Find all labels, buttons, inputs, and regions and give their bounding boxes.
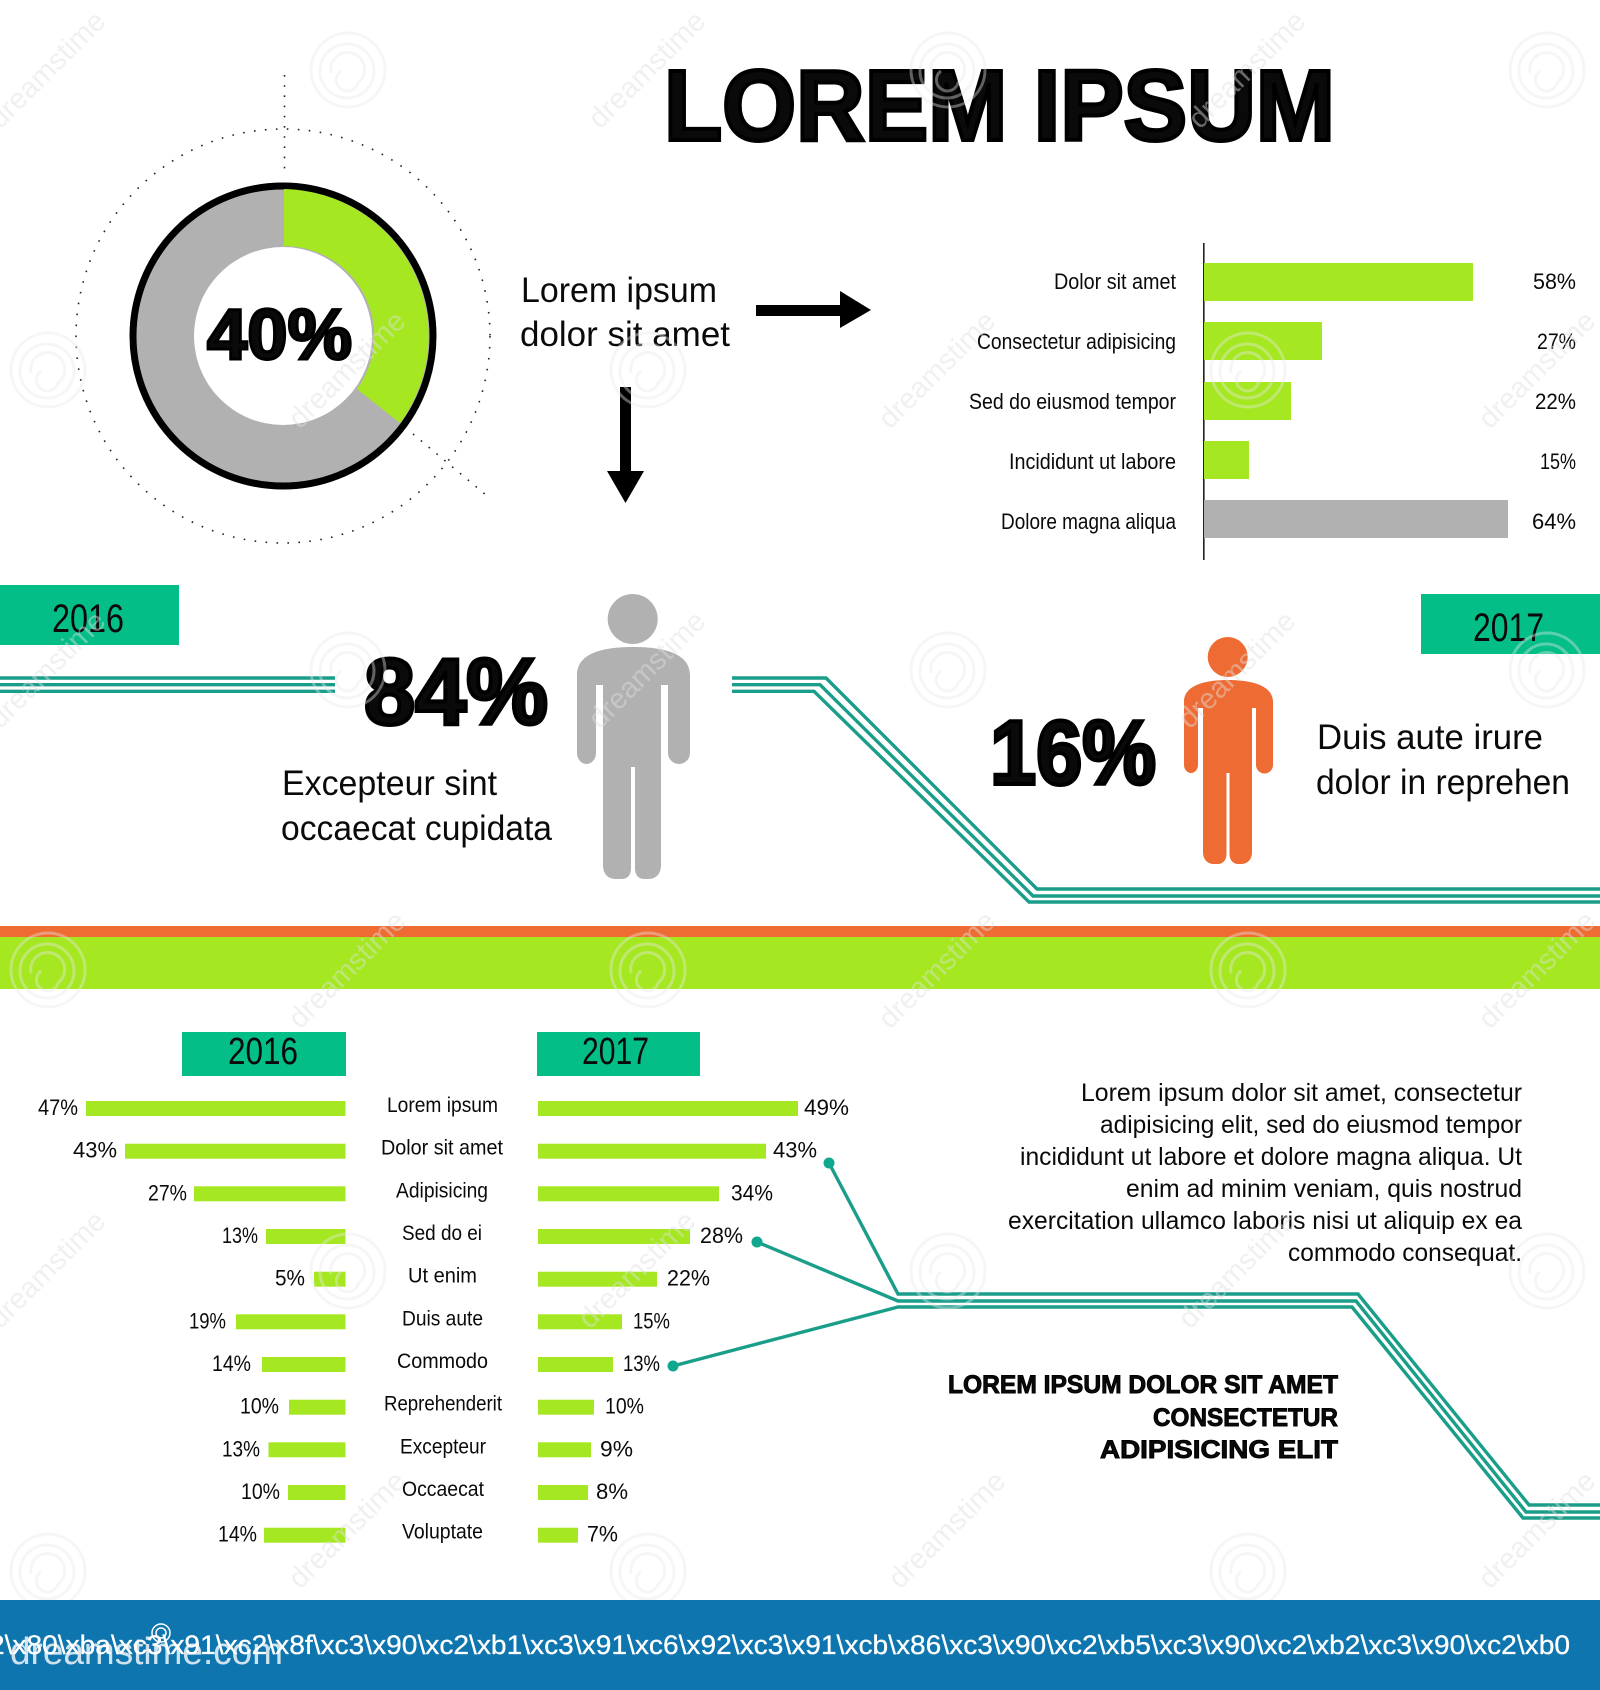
- watermark text: dreamstime: [872, 305, 1002, 435]
- connector dots: [668, 1158, 834, 1372]
- watermark text: dreamstime: [1472, 305, 1600, 435]
- chart: 2017 bars: [537, 1031, 849, 1547]
- values 2016: 5%: [275, 1266, 305, 1291]
- bold subheading: LOREM IPSUM DOLOR SIT AMET: [948, 1371, 1338, 1399]
- row labels: Adipisicing: [396, 1179, 488, 1202]
- chart: 2016 bars: [38, 1031, 346, 1547]
- values 2016: 47%: [38, 1095, 78, 1120]
- year tag: 2016: 2016: [52, 597, 124, 641]
- bar: incididunt ut labore 15%: [1009, 441, 1576, 479]
- values 2017: 49%: [804, 1095, 849, 1120]
- watermark text: dreamstime: [282, 1465, 412, 1595]
- chart heading: 2016: [182, 1031, 346, 1076]
- values 2017: 15%: [633, 1308, 670, 1333]
- donut base: [133, 186, 433, 486]
- bar: consectetur adipisicing 27%: Consectetur adipisicing: [977, 329, 1176, 354]
- row labels: Lorem ipsum: [387, 1094, 498, 1117]
- year tag: 2017: [1421, 594, 1600, 654]
- values 2016: 14%: [218, 1522, 257, 1547]
- donut caption: dolor sit amet: [520, 315, 730, 354]
- bar: dolore magna aliqua 64%: Dolore magna aliqua: [1001, 509, 1177, 534]
- donut hole: [194, 247, 372, 425]
- row labels: Duis aute: [402, 1307, 483, 1330]
- row labels: Reprehenderit: [384, 1393, 502, 1416]
- caption: duis aute: dolor in reprehen: [1316, 763, 1570, 802]
- watermark text: dreamstime: [1172, 605, 1302, 735]
- bar: dolor sit amet 58%: Dolor sit amet: [1054, 269, 1176, 294]
- caption: occaecat cupidata: [281, 809, 553, 848]
- bars 2016: [86, 1101, 346, 1543]
- row labels: Ut enim: [408, 1265, 477, 1288]
- stat: 84%: 84%: [364, 639, 548, 744]
- values 2017: 7%: [587, 1522, 618, 1547]
- teal lines: middle diagonal: [732, 678, 1600, 902]
- watermark text: dreamstime: [1172, 1205, 1302, 1335]
- caption: Excepteur sint: [282, 764, 497, 803]
- values 2017: 22%: [667, 1266, 710, 1291]
- bar: dolore magna aliqua 64%: [1001, 500, 1576, 538]
- bold subheading: CONSECTETUR: [1153, 1404, 1338, 1432]
- values 2017: 8%: [596, 1479, 628, 1504]
- chart heading: 2016: 2016: [228, 1031, 298, 1073]
- values 2016: [38, 1095, 305, 1547]
- row labels: Commodo: [397, 1350, 488, 1373]
- teal lines: left stub: [0, 678, 335, 691]
- arrow: right: [756, 291, 871, 328]
- paragraph: enim ad minim veniam, quis nostrud: [1126, 1175, 1522, 1203]
- connector lines from bars: [668, 1158, 1600, 1518]
- values 2016: 19%: [189, 1308, 226, 1333]
- footer logo text: dreamstime.com: [10, 1631, 283, 1673]
- values 2016: 13%: [222, 1223, 258, 1248]
- bold subheading: ADIPISICING ELIT: [1100, 1436, 1338, 1464]
- year tag: 2016: [0, 585, 179, 645]
- paragraph: incididunt ut labore et dolore magna aliqua. Ut: [1020, 1143, 1522, 1171]
- values 2017: 10%: [605, 1394, 644, 1419]
- axis: [1203, 243, 1205, 560]
- values 2017: 34%: [731, 1180, 773, 1205]
- title: LOREM IPSUM: [664, 50, 1335, 162]
- bar: sed do eiusmod tempor 22%: 22%: [1535, 389, 1576, 414]
- row labels: Occaecat: [402, 1478, 484, 1501]
- watermark text: dreamstime: [582, 605, 712, 735]
- watermark text: dreamstime: [582, 5, 712, 135]
- bold subheading: [948, 1371, 1338, 1464]
- watermark text: dreamstime: [572, 1205, 702, 1335]
- icon: orange person: [1184, 637, 1273, 864]
- donut chart: 40%: [76, 75, 490, 543]
- caption: duis aute: Duis aute irure: [1317, 718, 1543, 757]
- values 2017: 28%: [700, 1223, 743, 1248]
- bars 2017: [538, 1101, 798, 1543]
- paragraph: adipisicing elit, sed do eiusmod tempor: [1100, 1111, 1522, 1139]
- bar: sed do eiusmod tempor 22%: [969, 382, 1576, 420]
- bar: consectetur adipisicing 27%: [977, 322, 1576, 360]
- watermark text: dreamstime: [1472, 905, 1600, 1035]
- year tag: 2017: 2017: [1473, 606, 1544, 650]
- paragraph: commodo consequat.: [1288, 1239, 1522, 1267]
- row labels: Sed do ei: [402, 1222, 482, 1245]
- bar: consectetur adipisicing 27%: 27%: [1537, 329, 1576, 354]
- paragraph: [1008, 1079, 1522, 1267]
- values 2017: 43%: [773, 1138, 817, 1163]
- row labels: Excepteur: [400, 1435, 486, 1458]
- row labels: [381, 1094, 503, 1544]
- donut caption: Lorem ipsum: [521, 271, 717, 310]
- dotted guide ring: [76, 129, 490, 543]
- watermark text: dreamstime: [872, 905, 1002, 1035]
- caption: [281, 764, 553, 848]
- watermark text: dreamstime: [1472, 1465, 1600, 1595]
- donut value: 40%: [207, 296, 352, 375]
- stat: 84%: [281, 639, 553, 848]
- bar: dolor sit amet 58%: [1054, 263, 1576, 301]
- footer logo icon: [152, 1624, 170, 1642]
- bar chart: top right: [969, 243, 1576, 560]
- bar: incididunt ut labore 15%: Incididunt ut labore: [1009, 449, 1176, 474]
- row labels: Dolor sit amet: [381, 1137, 503, 1160]
- watermark text: dreamstime: [282, 305, 412, 435]
- watermark text: dreamstime: [882, 1465, 1012, 1595]
- arrow: down: [607, 387, 644, 503]
- values 2016: 10%: [241, 1479, 280, 1504]
- values 2017: [587, 1095, 849, 1547]
- paragraph: exercitation ullamco laboris nisi ut aliquip ex ea: [1008, 1207, 1522, 1235]
- donut caption: [520, 271, 730, 354]
- values 2017: 9%: [600, 1436, 633, 1461]
- footer bar: [0, 1600, 1600, 1690]
- watermark text: dreamstime: [282, 905, 412, 1035]
- paragraph: Lorem ipsum dolor sit amet, consectetur: [1081, 1079, 1522, 1107]
- values 2016: 27%: [148, 1180, 187, 1205]
- bar: sed do eiusmod tempor 22%: Sed do eiusmod tempor: [969, 389, 1176, 414]
- values 2017: 13%: [623, 1351, 660, 1376]
- values 2016: 10%: [240, 1394, 279, 1419]
- chart heading: 2017: [537, 1031, 700, 1076]
- watermark text: dreamstime: [1182, 5, 1312, 135]
- bar: dolor sit amet 58%: 58%: [1533, 269, 1576, 294]
- values 2016: 13%: [222, 1436, 260, 1461]
- chart heading: 2017: 2017: [582, 1031, 649, 1073]
- green segment: [284, 189, 429, 423]
- bar: incididunt ut labore 15%: 15%: [1540, 449, 1576, 474]
- dotted guide lines: [284, 75, 486, 495]
- divider band: orange: [0, 926, 1600, 937]
- values 2016: 43%: [73, 1138, 117, 1163]
- icon: grey person: [577, 594, 690, 879]
- divider band: green: [0, 937, 1600, 989]
- stat: 16%: 16%: [990, 703, 1156, 804]
- values 2016: 14%: [212, 1351, 251, 1376]
- row labels: Voluptate: [402, 1521, 483, 1544]
- bar: dolore magna aliqua 64%: 64%: [1532, 509, 1576, 534]
- caption: duis aute: [1316, 718, 1570, 802]
